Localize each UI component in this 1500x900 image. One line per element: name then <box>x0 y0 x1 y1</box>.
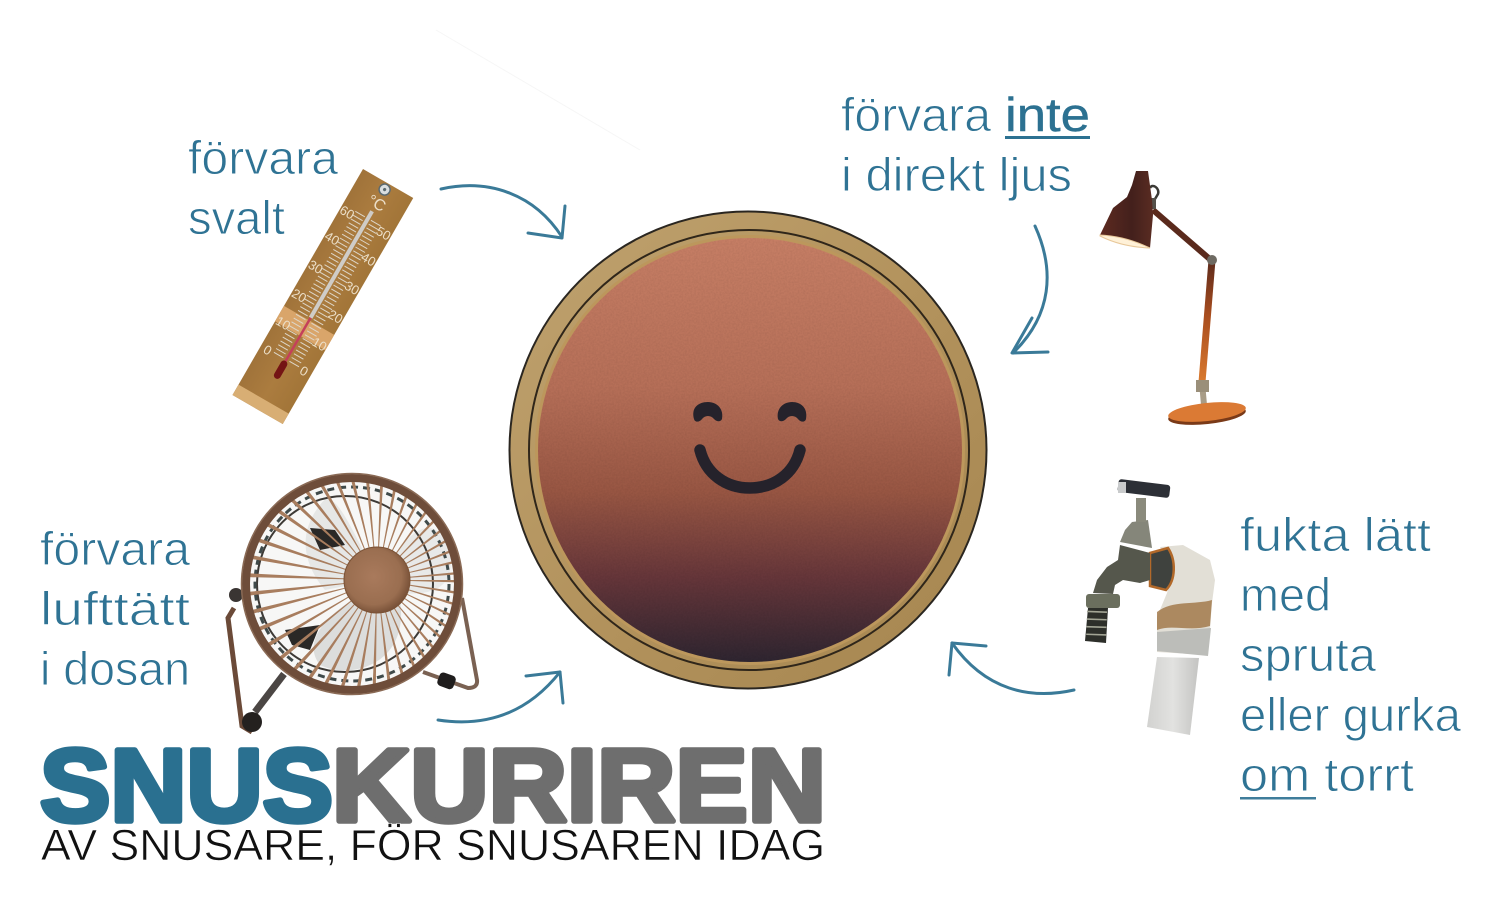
icon: wooden thermometer <box>232 169 413 424</box>
text: moisten lightly with spray or cucumber if dry: om torrt <box>1240 748 1414 801</box>
scale numbers: 0 <box>297 363 311 379</box>
text: do not store in direct light: inte <box>1005 88 1090 141</box>
scale numbers: 40 <box>322 228 342 248</box>
logo: Snuskuriren <box>40 728 826 870</box>
icon: desk lamp <box>1100 171 1247 428</box>
text: moisten lightly with spray or cucumber if dry: fukta lätt <box>1240 508 1431 561</box>
text: moisten lightly with spray or cucumber if dry: eller gurka <box>1240 688 1462 741</box>
smiley eyes and mouth <box>693 402 806 488</box>
text: store airtight in the can <box>40 522 191 695</box>
scale numbers: 40 <box>359 249 379 269</box>
text: store cool <box>188 131 339 244</box>
text: moisten lightly with spray or cucumber if dry: spruta <box>1240 628 1377 681</box>
text: do not store in direct light <box>841 88 1090 201</box>
text: store airtight in the can: förvara <box>40 522 191 575</box>
text: do not store in direct light: i direkt ljus <box>841 148 1072 201</box>
text: store airtight in the can: i dosan <box>40 642 190 695</box>
arrow: thermometer to coin <box>441 186 565 238</box>
arrow: fan to coin <box>438 672 563 722</box>
text: moisten lightly with spray or cucumber if dry <box>1240 508 1462 801</box>
scale numbers: 60 <box>337 202 357 223</box>
text: store airtight in the can: lufttätt <box>40 582 190 635</box>
text: store cool: förvara <box>188 131 339 184</box>
logo tagline: AV SNUSARE, FÖR SNUSAREN IDAG <box>41 821 825 870</box>
scale numbers: 10 <box>310 334 330 354</box>
coin with smiley <box>508 210 988 690</box>
text: do not store in direct light: förvara <box>841 88 992 141</box>
scale numbers: 10 <box>273 313 293 333</box>
logo: Snuskuriren: SNUS <box>40 728 333 843</box>
fan blades <box>285 499 451 670</box>
icon: wooden thermometer: °C <box>364 192 388 216</box>
coin face <box>538 238 962 662</box>
scale numbers <box>258 202 394 381</box>
text: moisten lightly with spray or cucumber if dry: med <box>1240 568 1331 621</box>
scale numbers: 20 <box>326 306 346 327</box>
scale numbers: 0 <box>261 342 275 358</box>
scale numbers: 20 <box>289 285 309 306</box>
fan grille wires <box>297 500 457 660</box>
scale numbers: 30 <box>306 257 326 277</box>
icon: water tap <box>1085 479 1215 735</box>
logo: Snuskuriren: KURIREN <box>332 728 826 843</box>
arrow: tap to coin <box>949 643 1074 694</box>
arrow: lamp to coin <box>1012 226 1048 353</box>
text: store cool: svalt <box>188 191 285 244</box>
scale numbers: 30 <box>342 278 362 298</box>
scale numbers: 50 <box>374 223 394 244</box>
icon: desk fan <box>228 474 477 732</box>
